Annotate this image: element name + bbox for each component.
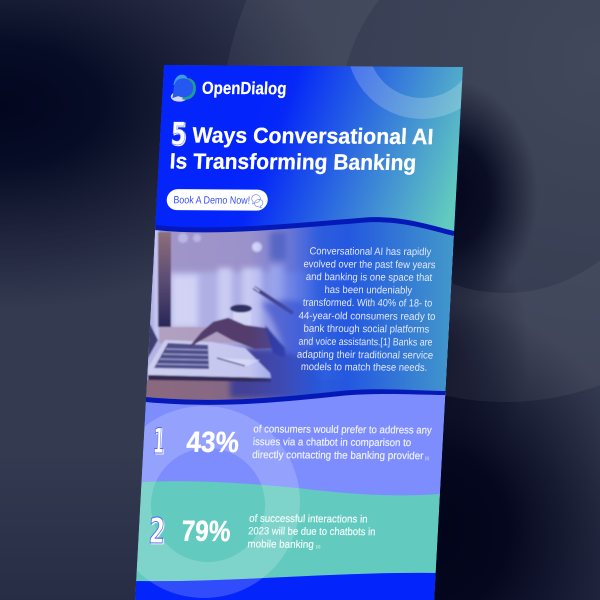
stat 1 text: issues via a chatbot in comparison to — [253, 436, 412, 449]
decorative ring top right — [350, 66, 462, 119]
stat 1 text: [3] — [425, 455, 429, 461]
panel: stat 1 background — [141, 389, 446, 496]
icon: OpenDialog logo — [171, 75, 197, 102]
decorative ring — [136, 406, 300, 598]
intro text: 44-year-old consumers ready to — [298, 311, 436, 323]
icon: chat bubbles — [251, 195, 263, 208]
intro text: models to match these needs. — [301, 362, 428, 374]
stat 1 text: of consumers would prefer to address any — [253, 423, 433, 437]
intro text: and voice assistants.[1] Banks are — [298, 337, 433, 349]
panel: intro photo with text — [146, 222, 454, 405]
panel: header — [155, 65, 463, 236]
stat 2 text: 2023 will be due to chatbots in — [248, 525, 376, 538]
stat 2 text — [247, 513, 377, 551]
title: Ways Conversational AI — [192, 123, 434, 149]
intro text: bank through social platforms — [303, 324, 429, 336]
button: book a demo: Book A Demo Now! — [173, 194, 250, 207]
stat 1 text: directly contacting the banking provider — [252, 449, 424, 462]
infographic card — [135, 65, 463, 600]
wave band under photo — [146, 389, 446, 405]
intro text — [295, 246, 439, 374]
title — [168, 117, 434, 175]
button: book a demo — [166, 189, 268, 211]
intro text: has been undeniably — [324, 285, 413, 297]
stat value 79%: 79% — [181, 516, 232, 548]
stat 2 text: mobile banking — [247, 538, 314, 551]
panel: stat 2 background — [136, 481, 441, 583]
title numeral 5: 5 — [170, 117, 188, 153]
intro text: Conversational AI has rapidly — [309, 246, 432, 258]
stat value 43%: 43% — [186, 427, 240, 459]
intro text: transformed. With 40% of 18- to — [303, 298, 433, 310]
stat 1 text — [252, 423, 433, 462]
photo — [130, 220, 460, 410]
stat 1 — [154, 424, 432, 462]
stat 2 — [150, 514, 375, 550]
stat 1: 1 — [152, 421, 165, 462]
number 2: 2 — [148, 511, 166, 552]
title: Is Transforming Banking — [169, 148, 417, 175]
intro text: adapting their traditional service — [297, 350, 434, 362]
stat 2 text: of successful interactions in — [249, 513, 368, 526]
stat 2 text: [2] — [316, 544, 321, 549]
intro text: and banking is one space that — [306, 272, 433, 284]
logo wordmark: OpenDialog — [201, 78, 287, 98]
footer band — [134, 571, 436, 600]
intro text: evolved over the past few years — [303, 259, 436, 271]
